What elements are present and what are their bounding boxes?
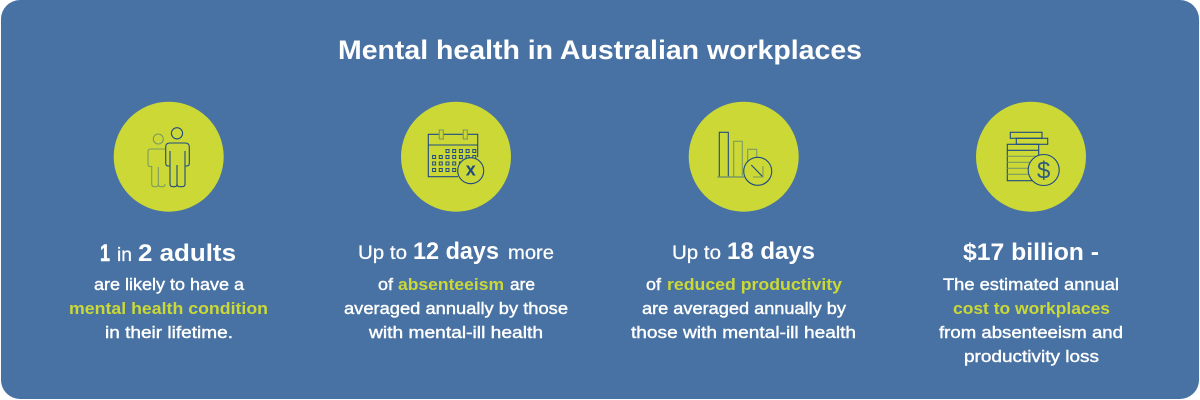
panel: 17 billion cost [939,102,1123,366]
text block: averaged annually by those [344,300,568,318]
heading: 2 adults [138,240,236,267]
text block [631,276,856,342]
icon: two people [114,102,224,212]
heading: $17 billion - [963,239,1099,266]
text block [939,276,1123,366]
icon: coins with dollar [976,102,1086,212]
icon: calendar badge: x [466,160,476,180]
heading [672,238,815,265]
panel: 12 days absenteeism [344,102,568,342]
icon: coins with dollar: $ [1037,158,1050,184]
heading: in [117,245,132,266]
text block: from absenteeism and [939,324,1123,342]
text block: The estimated annual [943,276,1119,294]
panel: 18 days productivity [631,102,856,342]
text block: mental health condition [69,300,268,318]
text block: are averaged annually by [642,300,847,318]
heading: 18 days [727,238,815,265]
heading: Up to [358,243,407,264]
text block: productivity loss [964,348,1099,366]
text block: cost to workplaces [953,300,1110,318]
heading: 1 [100,240,110,267]
text block: with mental-ill health [368,324,543,342]
icon: falling bars [689,102,799,212]
text block: of [378,276,393,294]
heading: more [508,243,554,264]
text block: reduced productivity [667,276,843,294]
text block: in their lifetime. [105,324,233,342]
text block: are [510,276,535,294]
text block: absenteeism [398,276,504,294]
icon: calendar with x [401,102,511,212]
heading [358,238,554,265]
heading [100,240,236,267]
panel: 1 in 2 adults [69,102,268,342]
heading: Up to [672,243,721,264]
text block: those with mental-ill health [631,324,856,342]
text block: of [646,276,661,294]
title: Mental health in Australian workplaces [338,35,862,65]
text block [69,276,268,342]
heading: 12 days [413,238,499,265]
text block [344,276,568,342]
text block: are likely to have a [94,276,245,294]
